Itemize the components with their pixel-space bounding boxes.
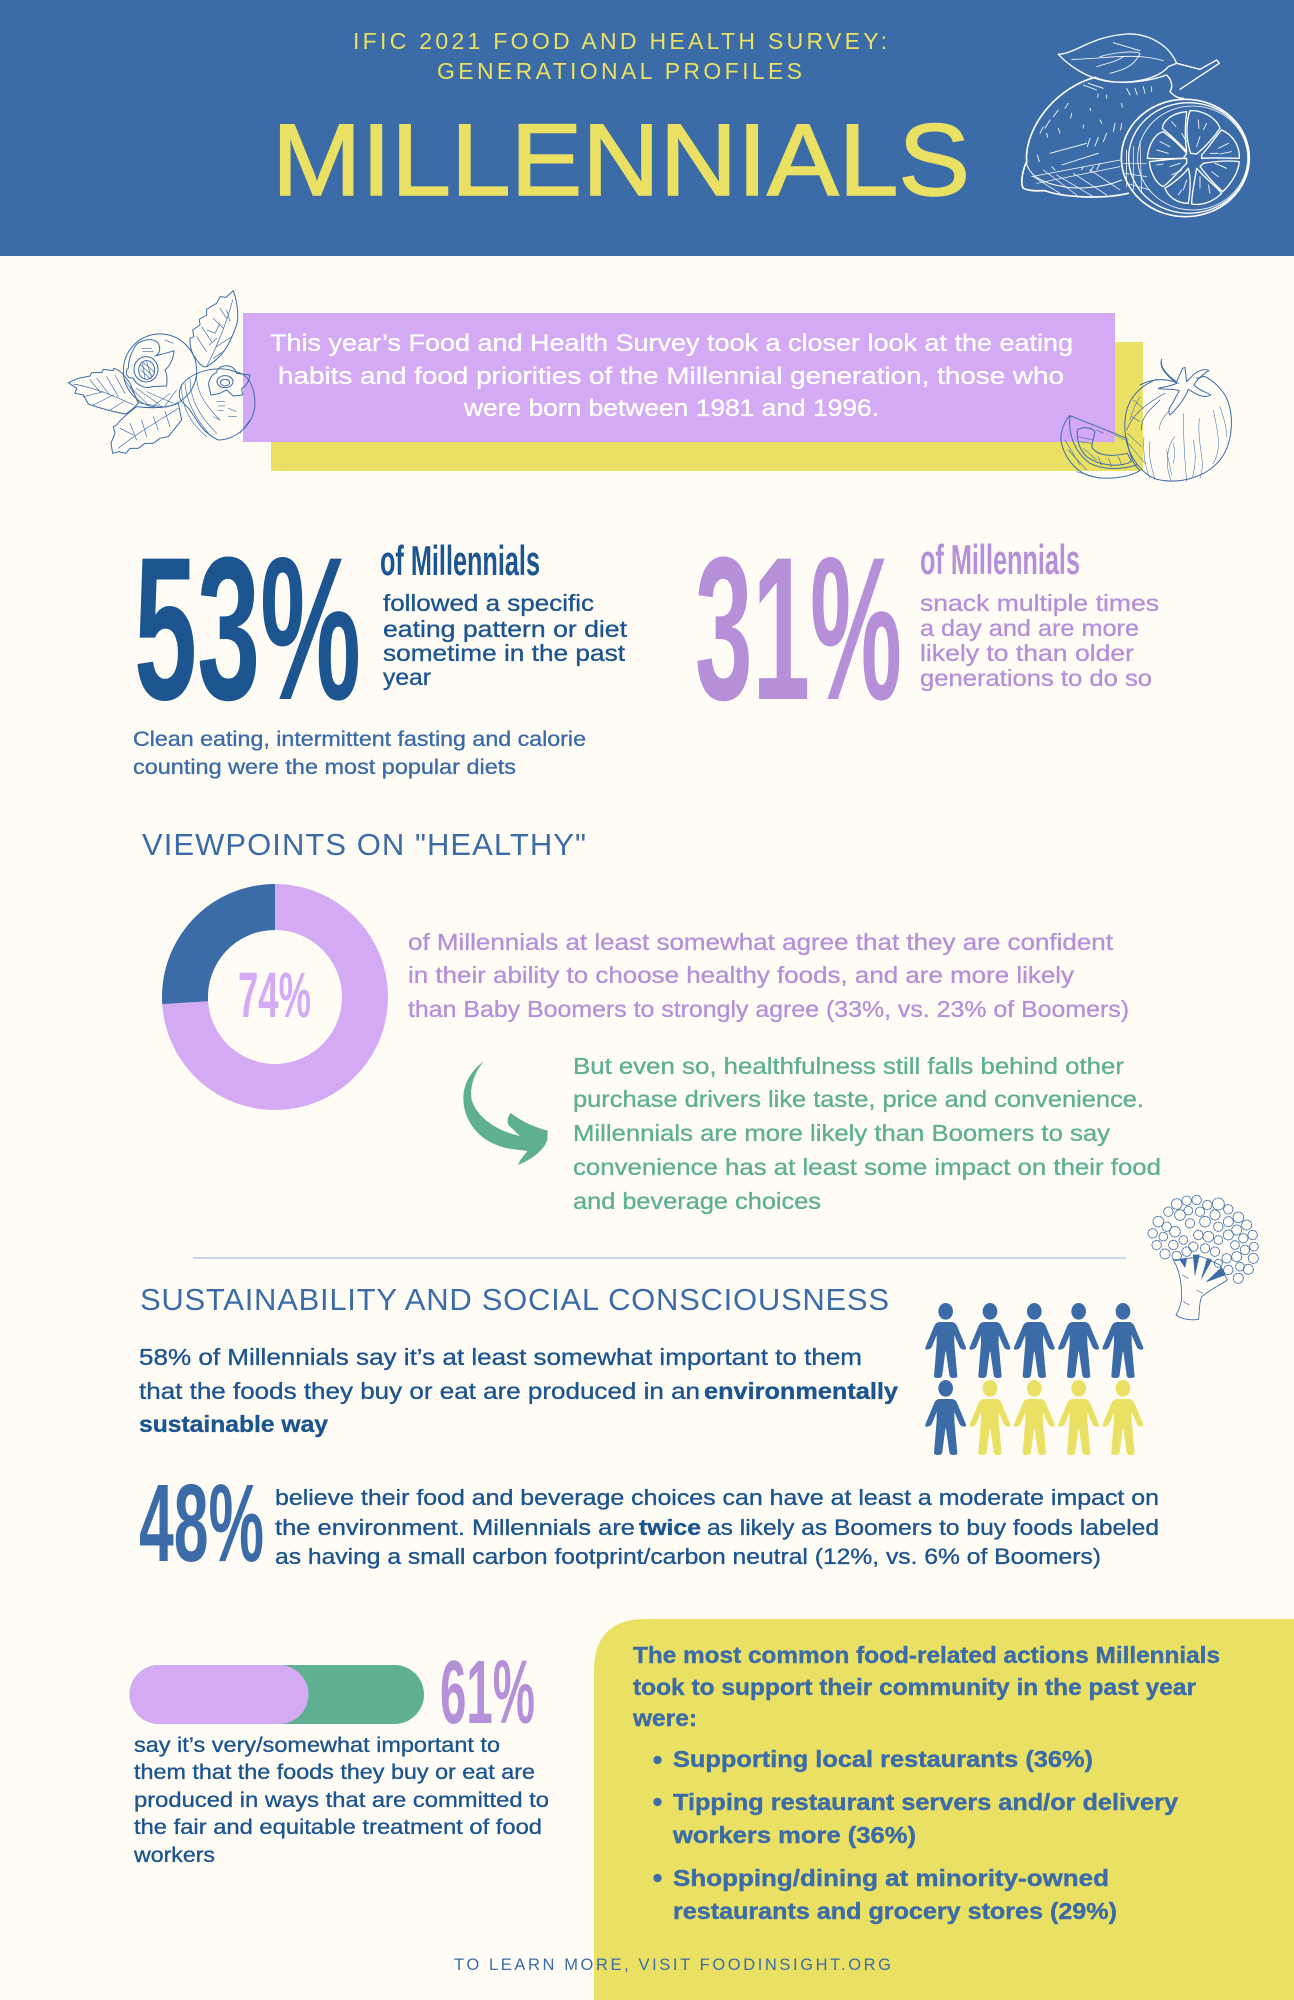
bullet list: Tipping restaurant servers and/or delivery [673, 1789, 1178, 1815]
panel: header band [0, 0, 1294, 256]
bullet list: Shopping/dining at minority-owned [673, 1865, 1109, 1891]
description: likely to than older [920, 640, 1134, 666]
description: a day and are more [920, 615, 1139, 641]
description: year [383, 664, 431, 690]
intro text: were born between 1981 and 1996. [463, 395, 879, 422]
healthfulness text [573, 1053, 1161, 1214]
stat: 48 percent: 48% [139, 1462, 264, 1585]
donut value: 74% [238, 959, 311, 1031]
carbon footprint text: twice [639, 1515, 701, 1540]
intro text: habits and food priorities of the Millennial generation, those who [278, 363, 1064, 390]
intro text: This year’s Food and Health Survey took a closer look at the eating [270, 330, 1073, 357]
icon: tomato and slice illustration [1061, 359, 1231, 482]
heading: sustainability: SUSTAINABILITY AND SOCIAL CONSCIOUSNESS [140, 1282, 889, 1317]
healthfulness text: purchase drivers like taste, price and convenience. [573, 1086, 1144, 1112]
healthfulness text: convenience has at least some impact on their food [573, 1154, 1161, 1180]
icon: broccoli illustration [1148, 1195, 1258, 1320]
note on popular diets [133, 728, 586, 779]
confidence text: in their ability to choose healthy foods, and are more likely [408, 962, 1075, 988]
note on popular diets: Clean eating, intermittent fasting and calorie [133, 728, 586, 751]
healthfulness text: Millennials are more likely than Boomers to say [573, 1120, 1111, 1146]
fair treatment text: produced in ways that are committed to [134, 1789, 549, 1812]
stat: 61 percent: 61% [440, 1643, 535, 1743]
fair treatment text: them that the foods they buy or eat are [134, 1761, 535, 1784]
big number 31%: 31% [695, 515, 902, 743]
panel intro text: were: [632, 1705, 697, 1731]
fair treatment text [133, 1734, 549, 1867]
panel intro text: The most common food-related actions Millennials [633, 1642, 1220, 1668]
description: followed a specific [383, 590, 594, 616]
subtitle: GENERATIONAL PROFILES [437, 58, 802, 84]
description: sometime in the past [383, 640, 626, 666]
description [383, 590, 628, 690]
icon: blueberries illustration [68, 291, 255, 453]
carbon footprint text: as likely as Boomers to buy foods labeled [707, 1515, 1159, 1540]
carbon footprint text: as having a small carbon footprint/carbon neutral (12%, vs. 6% of Boomers) [275, 1544, 1101, 1569]
subtitle: IFIC 2021 FOOD AND HEALTH SURVEY: [353, 28, 887, 54]
carbon footprint text: believe their food and beverage choices can have at least a moderate impact on [275, 1485, 1159, 1510]
bullet list: restaurants and grocery stores (29%) [673, 1898, 1117, 1924]
confidence text: than Baby Boomers to strongly agree (33%, vs. 23% of Boomers) [408, 996, 1129, 1022]
icon: lemon illustration [1022, 34, 1249, 217]
donut chart 74 percent [162, 884, 388, 1110]
environmental text: environmentally [704, 1378, 898, 1404]
bullet list: Supporting local restaurants (36%) [673, 1746, 1093, 1772]
panel intro text: took to support their community in the past year [633, 1674, 1196, 1700]
panel: intro box [243, 313, 1115, 442]
bullet list [654, 1746, 1178, 1924]
panel: community actions [594, 1619, 1294, 2000]
fair treatment text: the fair and equitable treatment of food [134, 1816, 542, 1839]
title: MILLENNIALS [272, 103, 970, 217]
big number 53%: 53% [134, 515, 361, 743]
heading: viewpoints: VIEWPOINTS ON "HEALTHY" [142, 827, 586, 862]
intro text [270, 330, 1073, 422]
healthfulness text: But even so, healthfulness still falls behind other [573, 1053, 1124, 1079]
environmental text [139, 1344, 898, 1437]
healthfulness text: and beverage choices [573, 1188, 821, 1214]
panel: intro shadow [271, 342, 1143, 471]
description: eating pattern or diet [383, 616, 628, 642]
environmental text: 58% of Millennials say it’s at least somewhat important to them [139, 1344, 862, 1370]
icon: curved arrow [463, 1061, 548, 1165]
icon: ten people pictogram [925, 1303, 1143, 1455]
bullet list: workers more (36%) [672, 1822, 916, 1848]
description: snack multiple times [920, 590, 1159, 616]
fair treatment text: workers [133, 1844, 215, 1867]
progress pill 61 percent [130, 1665, 424, 1724]
footer link text: TO LEARN MORE, VISIT FOODINSIGHT.ORG [454, 1956, 891, 1974]
label of Millennials: of Millennials [920, 536, 1080, 583]
environmental text: that the foods they buy or eat are produced in an [139, 1378, 700, 1404]
confidence text [408, 929, 1129, 1022]
subtitle [353, 28, 887, 84]
label of Millennials: of Millennials [380, 537, 540, 584]
description [920, 590, 1159, 691]
panel intro text [632, 1642, 1220, 1731]
stat: 31 percent [695, 515, 1159, 743]
note on popular diets: counting were the most popular diets [133, 756, 516, 779]
fair treatment text: say it’s very/somewhat important to [134, 1734, 500, 1757]
carbon footprint text: the environment. Millennials are [275, 1515, 635, 1540]
description: generations to do so [920, 665, 1152, 691]
confidence text: of Millennials at least somewhat agree that they are confident [408, 929, 1114, 955]
environmental text: sustainable way [139, 1411, 328, 1437]
carbon footprint text [275, 1485, 1159, 1569]
stat: 53 percent [134, 515, 628, 743]
